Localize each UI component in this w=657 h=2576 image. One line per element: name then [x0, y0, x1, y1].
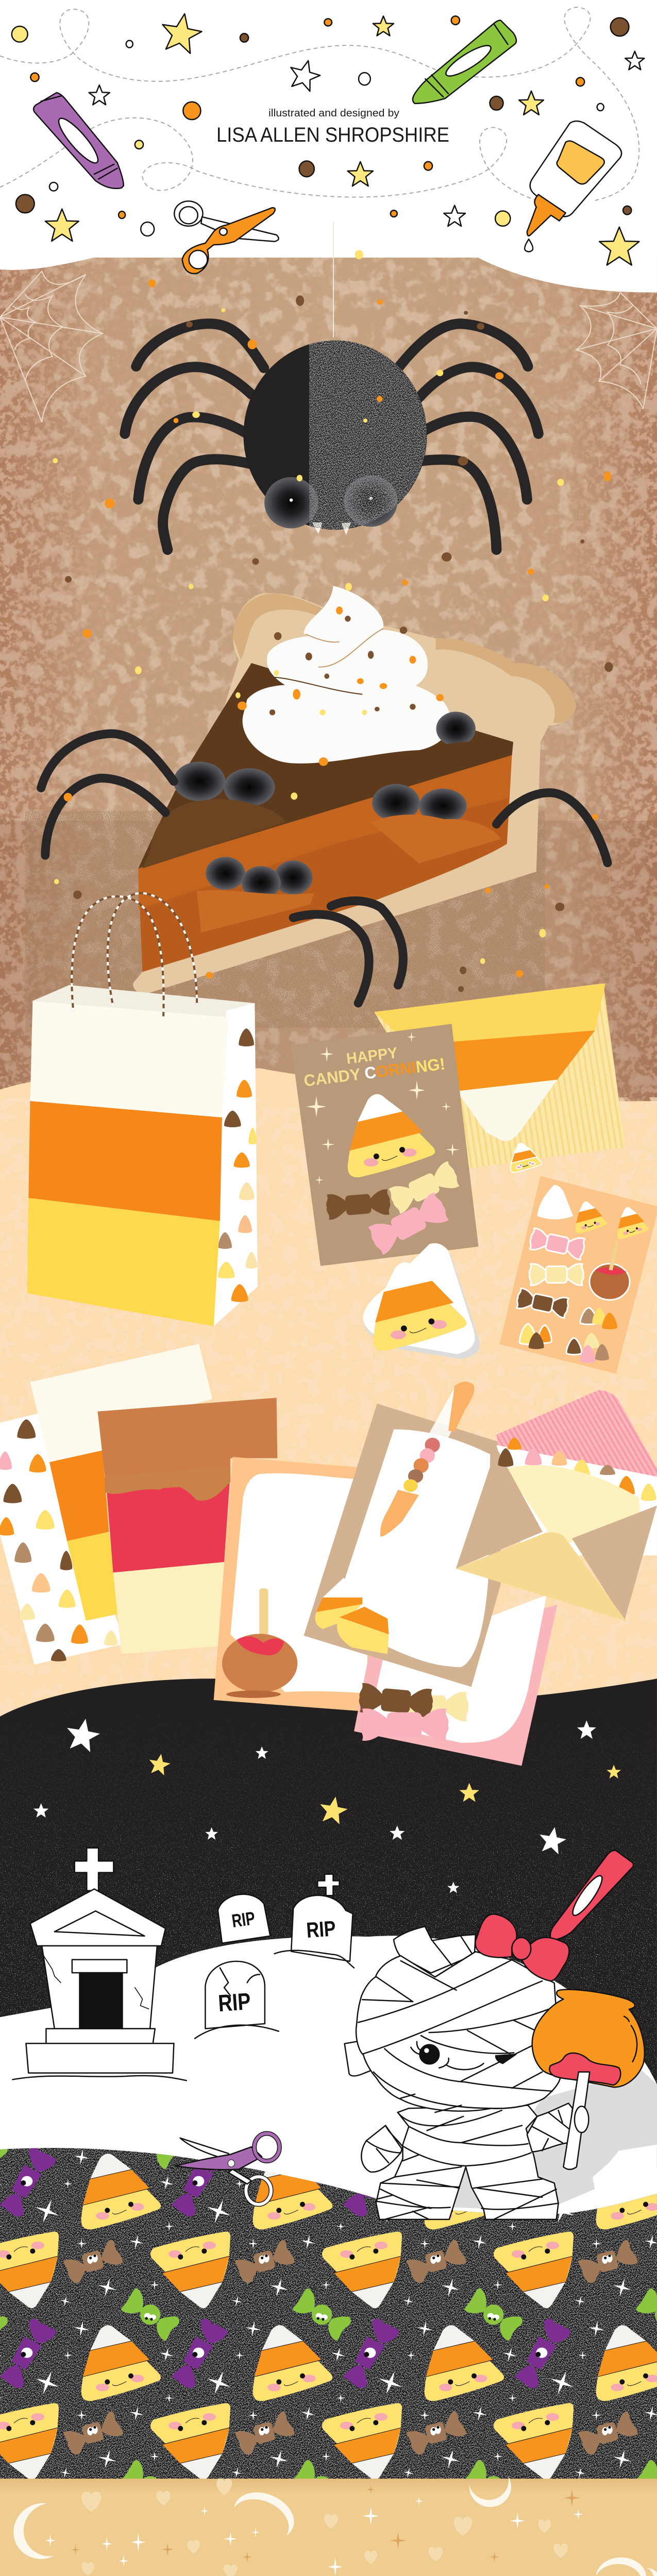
sand moon and stars pattern panel — [0, 2476, 657, 2576]
greeting card — [291, 1024, 479, 1266]
spider legs — [125, 324, 538, 550]
mummy character — [345, 1914, 645, 2219]
icon: orange scissors — [174, 201, 279, 274]
mummy body bandages — [366, 2110, 568, 2219]
card candy corn — [348, 1094, 435, 1177]
pie filling side — [138, 753, 512, 972]
mummy face — [411, 2042, 516, 2070]
pie floor shadow — [25, 811, 545, 1028]
mummy side bandage end — [345, 2042, 373, 2076]
candy corn pattern panel — [0, 2148, 657, 2479]
icon: purple crayon — [33, 93, 124, 189]
coloring page: near tombstone: RIP — [217, 1988, 251, 2016]
hearts and sparkles on sand — [45, 2479, 583, 2576]
sprinkles scattered on kraft — [53, 250, 611, 509]
spider body — [243, 341, 427, 530]
candy cluster on pink sheet — [358, 1683, 448, 1741]
designer name: LISA ALLEN SHROPSHIRE — [216, 124, 449, 146]
mummy head bandages — [358, 1936, 552, 2126]
crypt cross — [75, 1848, 113, 1891]
mummy right arm — [527, 2103, 572, 2152]
big spider — [125, 324, 538, 550]
coloring page: cross tombstone — [275, 1874, 354, 1968]
peach background — [0, 1068, 657, 1753]
gusset candy dots — [218, 1028, 257, 1302]
icon: glue bottle — [525, 121, 621, 252]
coloring page: crypt — [12, 1848, 187, 2080]
credit line: illustrated and designed by — [268, 108, 399, 119]
header dashed stitch lines — [0, 7, 639, 200]
coloring page: far tombstone — [218, 1894, 270, 1943]
candy corn sticky notepad — [363, 1243, 480, 1359]
cobweb left — [0, 271, 103, 422]
spider eyes — [264, 476, 398, 529]
card greeting: CANDY CORNING!: CANDY CORNING! — [302, 1054, 446, 1090]
notepad candy corns — [315, 1578, 415, 1658]
header stars — [45, 10, 644, 265]
white graveyard hill — [0, 1936, 657, 2235]
card sparkles — [306, 1032, 459, 1184]
mummy body — [376, 2105, 559, 2219]
coloring page: cross tombstone: RIP — [306, 1916, 336, 1942]
caramel apple — [222, 1588, 297, 1698]
spider fangs — [312, 522, 351, 535]
sprinkles on pie — [54, 539, 613, 992]
spider fur speckle — [309, 340, 428, 531]
red crayon — [550, 1851, 633, 1940]
icon: green crayon — [413, 20, 516, 104]
spiders peeking: legs — [41, 734, 608, 1003]
twine handles — [72, 893, 197, 1016]
card wrapped candies — [325, 1160, 461, 1256]
bag back and gusset — [32, 985, 255, 1017]
moons on sand — [11, 2476, 656, 2576]
candy sticker on envelope — [511, 1143, 542, 1173]
stationery: peach letter sheet — [214, 1457, 371, 1712]
pumpkin pie slice — [41, 539, 613, 1003]
candy sticker sheet — [499, 1176, 657, 1374]
header white wave — [0, 0, 657, 293]
bag front bands — [30, 1001, 228, 1117]
sprinkles on cream — [235, 583, 444, 766]
moons and sparkles, second row — [15, 2566, 657, 2576]
candy corn gift bag — [27, 985, 258, 1326]
sugar skull pattern panel — [0, 2488, 657, 2576]
stickers — [515, 1185, 649, 1363]
stationery: caramel apple paper — [97, 1398, 277, 1654]
mummy red bow — [475, 1914, 569, 1981]
spiders peeking: eyes — [174, 711, 476, 899]
mummy shadow — [453, 2070, 657, 2211]
stationery: orange gel pen — [380, 1382, 474, 1536]
pie mounds covering eyes — [142, 741, 512, 933]
whipped cream — [243, 586, 451, 764]
mummy left arm — [361, 2126, 403, 2172]
coloring page: near tombstone — [195, 1961, 279, 2039]
stationery: pink letter sheet — [354, 1595, 557, 1766]
coloured-in caramel apple — [532, 1990, 645, 2170]
coloring page: far tombstone: RIP — [230, 1907, 256, 1931]
header confetti dots — [12, 16, 631, 236]
pink and brown candies — [395, 1692, 468, 1721]
night sky panel — [0, 1679, 657, 2170]
pie chocolate top — [138, 663, 513, 869]
yellow striped envelope — [374, 984, 625, 1173]
icon: purple scissors — [175, 2133, 279, 2205]
spider silk thread — [333, 222, 334, 337]
stationery: pink striped envelope — [456, 1390, 657, 1621]
pie crust — [133, 593, 576, 995]
stationery: tan notepad — [304, 1403, 501, 1687]
mummy head — [356, 1952, 561, 2111]
panel: tan kraft backdrop — [0, 258, 657, 1133]
card greeting: HAPPY: HAPPY — [345, 1044, 398, 1067]
night stars — [33, 1716, 621, 1893]
mummy topknot wraps — [394, 1926, 476, 1973]
cobweb right — [576, 293, 657, 409]
stationery: candy corn striped paper — [30, 1344, 212, 1621]
stationery: polka candy paper — [0, 1414, 126, 1665]
